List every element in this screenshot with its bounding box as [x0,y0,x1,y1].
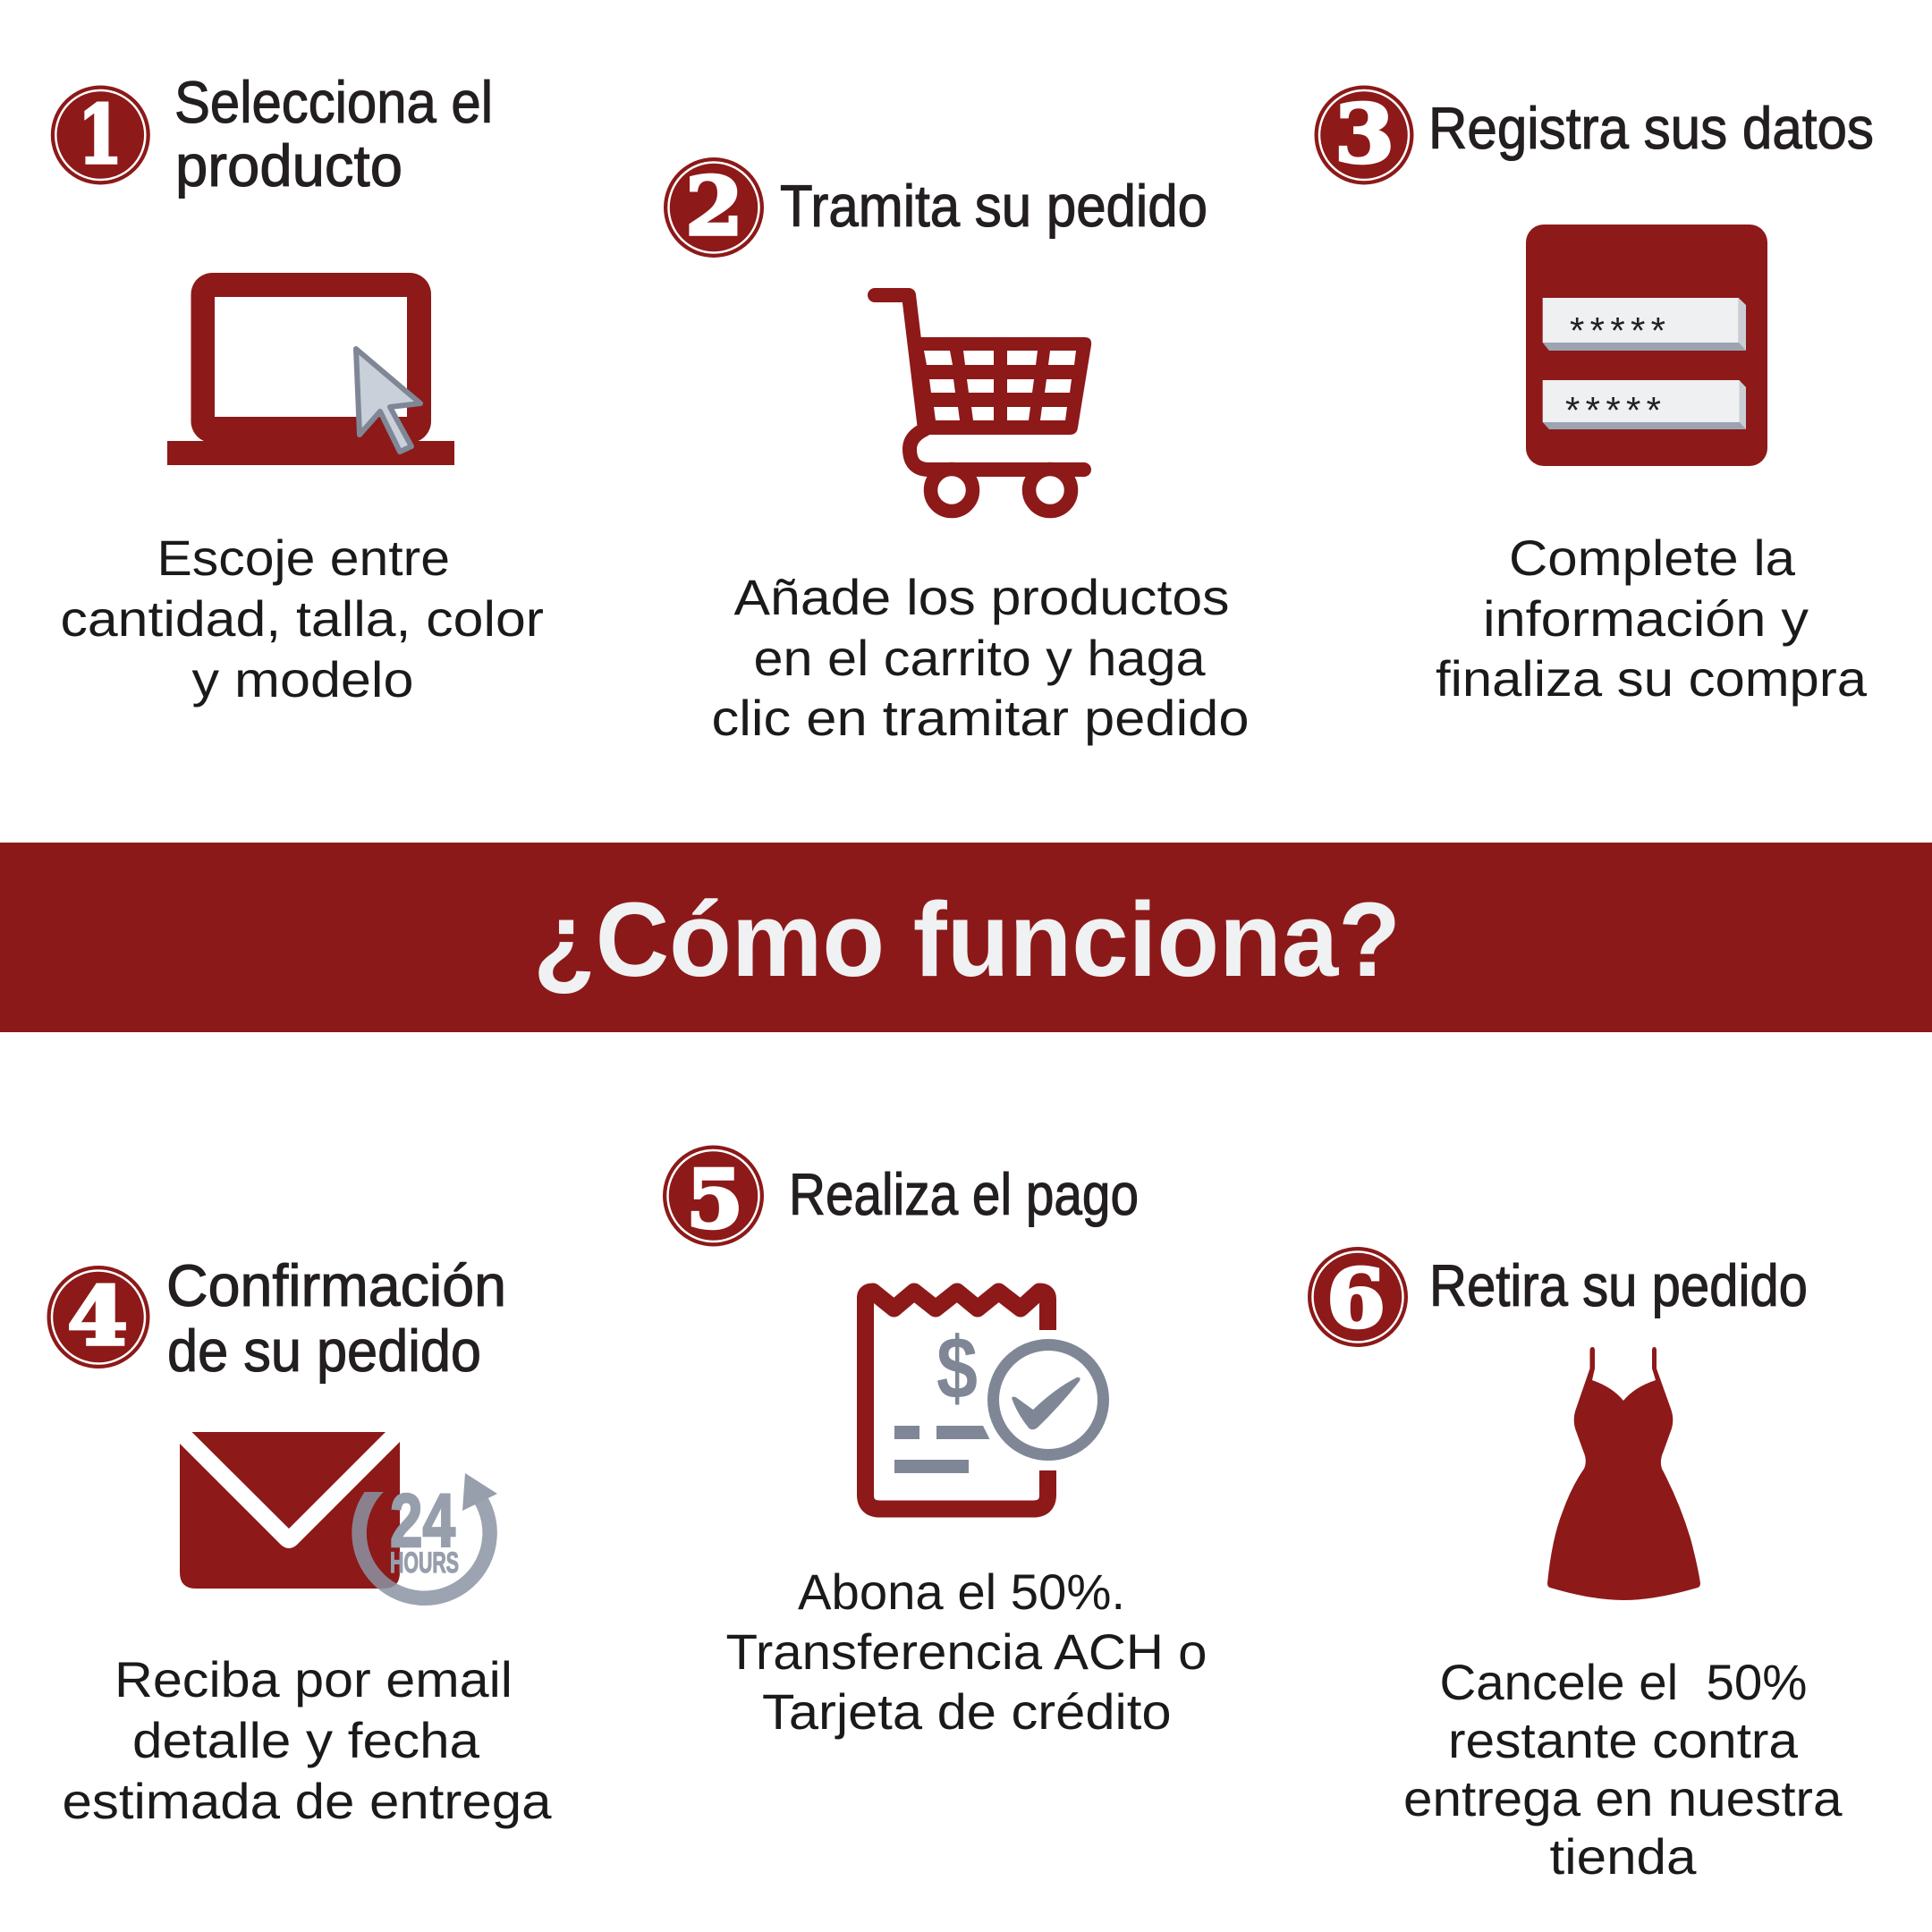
text: step 4 description: Reciba por email [114,1651,513,1707]
text: step 5 description [726,1563,1208,1740]
icon: shopping cart [875,295,1091,512]
text: step 4 description: estimada de entrega [63,1773,552,1829]
panel: step 6 [1308,1247,1843,1885]
heading: Selecciona el producto [174,69,493,199]
heading: Confirmación de su pedido: de su pedido [167,1318,481,1384]
heading: Selecciona el producto: Selecciona el [174,69,493,135]
icon: envelope with 24 hours [180,1432,497,1598]
text: step 5 description: Transferencia ACH o [726,1623,1208,1680]
icon: dress [1547,1347,1700,1600]
text: step 3 description: finaliza su compra [1436,650,1868,707]
icon: envelope with 24 hours: HOURS [390,1546,459,1579]
icon: receipt with check: $ [936,1318,978,1417]
text: step 1 description: y modelo [191,651,413,708]
badge: number 6 [1308,1247,1408,1347]
panel: step 3 [1315,86,1874,707]
heading: Confirmación de su pedido [166,1252,506,1384]
banner: title [0,843,1932,1032]
text: step 6 description: restante contra [1448,1712,1799,1768]
heading: Tramita su pedido: Tramita su pedido [780,173,1208,239]
heading: Selecciona el producto: producto [175,132,402,199]
text: step 1 description: cantidad, talla, color [61,590,544,647]
text: step 6 description: entrega en nuestra [1403,1770,1843,1826]
icon: envelope with 24 hours: 24 [390,1479,455,1563]
badge: number 4: 4 [67,1269,128,1364]
badge: number 3 [1315,86,1413,184]
badge: number 5 [663,1145,764,1247]
text: step 1 description [61,530,544,708]
text: step 2 description: Añade los productos [733,569,1229,625]
heading: Confirmación de su pedido: Confirmación [166,1252,506,1318]
icon: receipt with check [866,1292,1104,1509]
panel: step 1 [51,69,544,708]
panel: step 4 [47,1252,552,1829]
text: step 5 description: Abona el 50%. [798,1563,1125,1620]
heading: Realiza el pago: Realiza el pago [789,1161,1139,1227]
badge: number 5: 5 [686,1152,743,1247]
badge: number 2: 2 [685,159,743,254]
banner: title: ¿Cómo funciona? [533,881,1401,999]
icon: laptop with cursor [167,273,454,465]
panel: step 5 [663,1145,1208,1740]
heading: Retira su pedido: Retira su pedido [1429,1252,1808,1318]
text: step 3 description [1436,530,1868,707]
text: step 1 description: Escoje entre [157,530,450,586]
heading: Registra sus datos: Registra sus datos [1428,95,1874,161]
text: step 6 description [1403,1654,1843,1885]
badge: number 6: 6 [1326,1251,1385,1346]
panel: step 2 [664,157,1249,746]
icon: login form: ***** [1565,389,1661,431]
badge: number 3: 3 [1335,87,1394,182]
icon: login form [1526,225,1767,466]
badge: number 1: 1 [78,88,123,182]
text: step 4 description [63,1651,552,1829]
text: step 3 description: Complete la [1509,530,1796,586]
text: step 2 description [712,569,1249,746]
text: step 3 description: información y [1483,590,1809,647]
text: step 6 description: Cancele el 50% [1440,1654,1807,1710]
badge: number 2 [664,157,764,258]
text: step 6 description: tienda [1549,1828,1697,1885]
text: step 2 description: clic en tramitar pedido [712,690,1249,746]
badge: number 4 [47,1266,150,1368]
text: step 2 description: en el carrito y haga [753,630,1206,686]
text: step 5 description: Tarjeta de crédito [762,1683,1172,1740]
badge: number 1 [51,86,150,184]
text: step 4 description: detalle y fecha [132,1712,480,1768]
icon: login form: ***** [1570,309,1665,352]
